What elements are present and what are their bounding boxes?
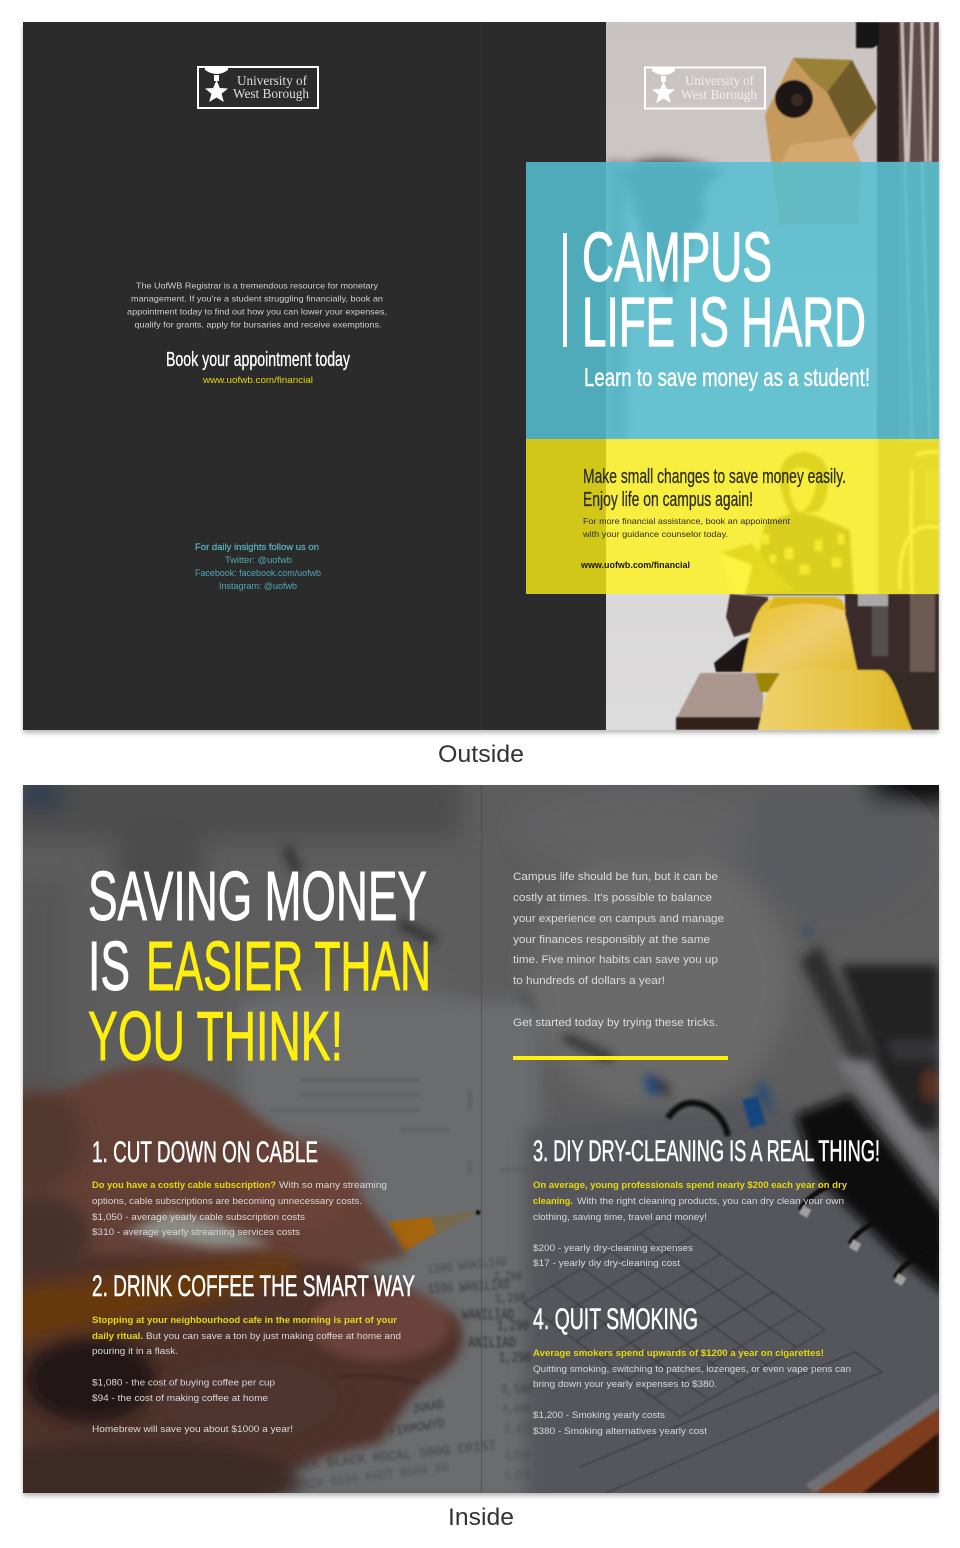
link: financial url: www.uofwb.com/financial bbox=[202, 375, 313, 386]
text block: yellow panel copy: Enjoy life on campus again! bbox=[583, 488, 753, 511]
section: drink coffee: $94 - the cost of making coffee at home bbox=[92, 1393, 268, 1404]
title: campus life is hard: CAMPUS bbox=[582, 218, 772, 296]
title: saving money: EASIER THAN bbox=[146, 927, 431, 1005]
notebook page bbox=[522, 1096, 796, 1493]
section: quit smoking: $380 - Smoking alternatives yearly cost bbox=[533, 1426, 707, 1437]
photo: hand with pencil over receipt bbox=[0, 770, 960, 1520]
title: saving money: SAVING MONEY bbox=[88, 857, 427, 935]
text block: registrar message: The UofWB Registrar is a tremendous resource for monetary bbox=[136, 280, 379, 290]
section: drink coffee: Stopping at your neighbourhood cafe in the morning is part of your bbox=[92, 1315, 397, 1326]
chairs and desks bbox=[676, 594, 939, 730]
text block: yellow panel copy: with your guidance counselor today. bbox=[582, 529, 728, 539]
text block: yellow panel copy: For more financial assistance, book an appointment bbox=[583, 516, 791, 526]
text block: introduction: Get started today by trying these tricks. bbox=[513, 1017, 718, 1029]
receipt print: 1,290 bbox=[497, 1318, 529, 1335]
section: diy dry-cleaning: clothing, saving time, travel and money! bbox=[533, 1212, 707, 1223]
section: drink coffee: 2. DRINK COFFEE THE SMART WAY bbox=[92, 1270, 415, 1303]
calculator bbox=[800, 945, 939, 1130]
text block: registrar message: qualify for grants, apply for bursaries and receive exemptions. bbox=[134, 320, 382, 330]
section: cut down on cable bbox=[92, 1136, 387, 1238]
section: drink coffee: But you can save a ton by just making coffee at home and bbox=[146, 1331, 401, 1342]
section: diy dry-cleaning: $200 - yearly dry-cleaning expenses bbox=[533, 1243, 693, 1254]
section: quit smoking bbox=[533, 1303, 851, 1437]
receipt print: 1,590 bbox=[505, 1450, 529, 1462]
receipt print: WANILIAD bbox=[462, 1307, 514, 1324]
title: campus life is hard bbox=[582, 218, 866, 361]
yellow subtitle panel bbox=[526, 439, 939, 594]
receipt print bbox=[298, 1256, 532, 1488]
panel: inside brochure bbox=[0, 770, 960, 1520]
text block: yellow panel copy: www.uofwb.com/financial bbox=[580, 560, 690, 571]
divider bar: title accent bbox=[563, 233, 567, 347]
receipt print: MS SEREK BLACK MOCAL 500G CRIST bbox=[257, 1438, 497, 1478]
binder shadow wedge bbox=[795, 1095, 945, 1295]
binder rings bbox=[799, 1182, 941, 1286]
section: quit smoking: $1,200 - Smoking yearly costs bbox=[533, 1410, 665, 1421]
receipt print: 6,590 bbox=[505, 1470, 529, 1482]
section: diy dry-cleaning bbox=[533, 1135, 880, 1269]
divider: yellow rule bbox=[513, 1056, 728, 1060]
woman reading bbox=[606, 439, 939, 595]
panel: outside brochure bbox=[23, 22, 939, 733]
section: drink coffee bbox=[92, 1270, 415, 1435]
text block: social media: Twitter: @uofwb bbox=[225, 555, 292, 565]
blurred receipt lines bbox=[270, 1080, 530, 1175]
text block: social media: Facebook: facebook.com/uofwb bbox=[195, 568, 321, 578]
text block: registrar message: appointment today to find out how you can lower your expenses, bbox=[127, 306, 387, 316]
logo: back cover: University of bbox=[237, 73, 307, 88]
section: drink coffee: Homebrew will save you about $1000 a year! bbox=[92, 1424, 293, 1435]
text block: introduction: your experience on campus and manage bbox=[513, 913, 724, 925]
title: saving money bbox=[88, 857, 431, 1075]
text block: social media: For daily insights follow us on bbox=[195, 542, 319, 552]
wooden post and curtain bbox=[856, 22, 939, 440]
notebook grid bbox=[524, 1216, 882, 1500]
text block: registrar message: management. If you're a student struggling financially, book an bbox=[131, 294, 383, 304]
section: cut down on cable: $1,050 - average yearly cable subscription costs bbox=[92, 1212, 305, 1223]
receipt print: 1,290 bbox=[494, 1269, 522, 1284]
logo: back cover bbox=[198, 67, 318, 108]
text block: introduction: your finances responsibly at the same bbox=[513, 934, 710, 946]
text block: introduction: costly at times. It's possible to balance bbox=[513, 892, 712, 904]
plant bbox=[606, 159, 725, 442]
section: quit smoking: Quitting smoking, switching to patches, lozenges, or even vape pens can bbox=[533, 1364, 851, 1375]
text block: registrar message bbox=[127, 280, 387, 330]
section: cut down on cable: $310 - average yearly streaming services costs bbox=[92, 1227, 300, 1238]
section: diy dry-cleaning: cleaning. bbox=[533, 1196, 573, 1207]
logo: back cover: West Borough bbox=[233, 86, 309, 101]
text block: introduction: to hundreds of dollars a year! bbox=[513, 975, 665, 987]
pencil tip bbox=[388, 1210, 480, 1252]
logo: front cover bbox=[645, 68, 765, 108]
title: saving money: IS bbox=[88, 927, 130, 1005]
receipt print: 1,290 bbox=[499, 1350, 531, 1367]
receipt bbox=[240, 1000, 540, 1500]
title: saving money: YOU THINK! bbox=[88, 997, 343, 1075]
receipt print: 1,290 bbox=[495, 1291, 526, 1307]
section: cut down on cable: options, cable subscriptions are becoming unnecessary costs. bbox=[92, 1196, 362, 1207]
receipt print: 4,490 bbox=[502, 1404, 530, 1416]
subtitle: learn to save: Learn to save money as a student! bbox=[584, 364, 870, 392]
section: cut down on cable: With so many streaming bbox=[279, 1180, 387, 1191]
text block: social media bbox=[195, 542, 321, 591]
speaker bbox=[765, 58, 877, 225]
heading: book appointment: Book your appointment today bbox=[166, 349, 350, 371]
text block: introduction: Campus life should be fun, but it can be bbox=[513, 871, 718, 883]
caption: inside: Inside bbox=[448, 1504, 514, 1531]
spine fold bbox=[481, 785, 482, 1493]
section: diy dry-cleaning: On average, young professionals spend nearly $200 each year on dry bbox=[533, 1180, 848, 1191]
section: quit smoking: Average smokers spend upwards of $1200 a year on cigarettes! bbox=[533, 1348, 824, 1359]
receipt print: 3,150 bbox=[504, 1424, 532, 1436]
receipt print: ANILIAD bbox=[468, 1335, 516, 1352]
logo: front cover: University of bbox=[685, 73, 754, 88]
receipt print: SERIK 0100 KHOT 8100 99 bbox=[289, 1461, 449, 1494]
section: cut down on cable: Do you have a costly cable subscription? bbox=[92, 1180, 276, 1191]
text block: yellow panel copy: Make small changes to save money easily. bbox=[583, 465, 846, 488]
receipt print: 150G WANILIAD bbox=[427, 1255, 508, 1277]
receipt print: 150G WANILIAD bbox=[427, 1278, 510, 1298]
light edge beside binder bbox=[835, 1060, 945, 1205]
text block: yellow panel copy bbox=[580, 465, 846, 571]
blurred background tones bbox=[23, 785, 939, 1104]
section: quit smoking: bring down your yearly expenses to $380. bbox=[533, 1379, 717, 1390]
text block: introduction bbox=[513, 871, 724, 1029]
section: diy dry-cleaning: With the right cleaning products, you can dry clean your own bbox=[577, 1196, 844, 1207]
hand bbox=[0, 1065, 463, 1520]
section: drink coffee: $1,080 - the cost of buying coffee per cup bbox=[92, 1378, 275, 1388]
folded paper between fingers bbox=[127, 1212, 272, 1248]
receipt print: FIRMOWYD bbox=[388, 1415, 446, 1440]
blurred binder rings bbox=[286, 847, 811, 1115]
caption: outside: Outside bbox=[438, 741, 524, 768]
receipt print: JUKAD bbox=[411, 1397, 445, 1417]
section: drink coffee: pouring it in a flask. bbox=[92, 1346, 178, 1357]
section: diy dry-cleaning: $17 - yearly diy dry-cleaning cost bbox=[533, 1258, 680, 1269]
text block: social media: Instagram: @uofwb bbox=[219, 581, 297, 591]
photo: desk and yellow chairs bbox=[606, 22, 939, 730]
section: cut down on cable: 1. CUT DOWN ON CABLE bbox=[92, 1136, 318, 1169]
teal title panel bbox=[526, 162, 939, 439]
receipt print: 3,560 bbox=[501, 1382, 533, 1398]
logo: front cover: West Borough bbox=[681, 87, 757, 102]
section: drink coffee: daily ritual. bbox=[92, 1331, 143, 1342]
text block: introduction: time. Five minor habits can save you up bbox=[513, 954, 718, 966]
section: quit smoking: 4. QUIT SMOKING bbox=[533, 1303, 698, 1336]
